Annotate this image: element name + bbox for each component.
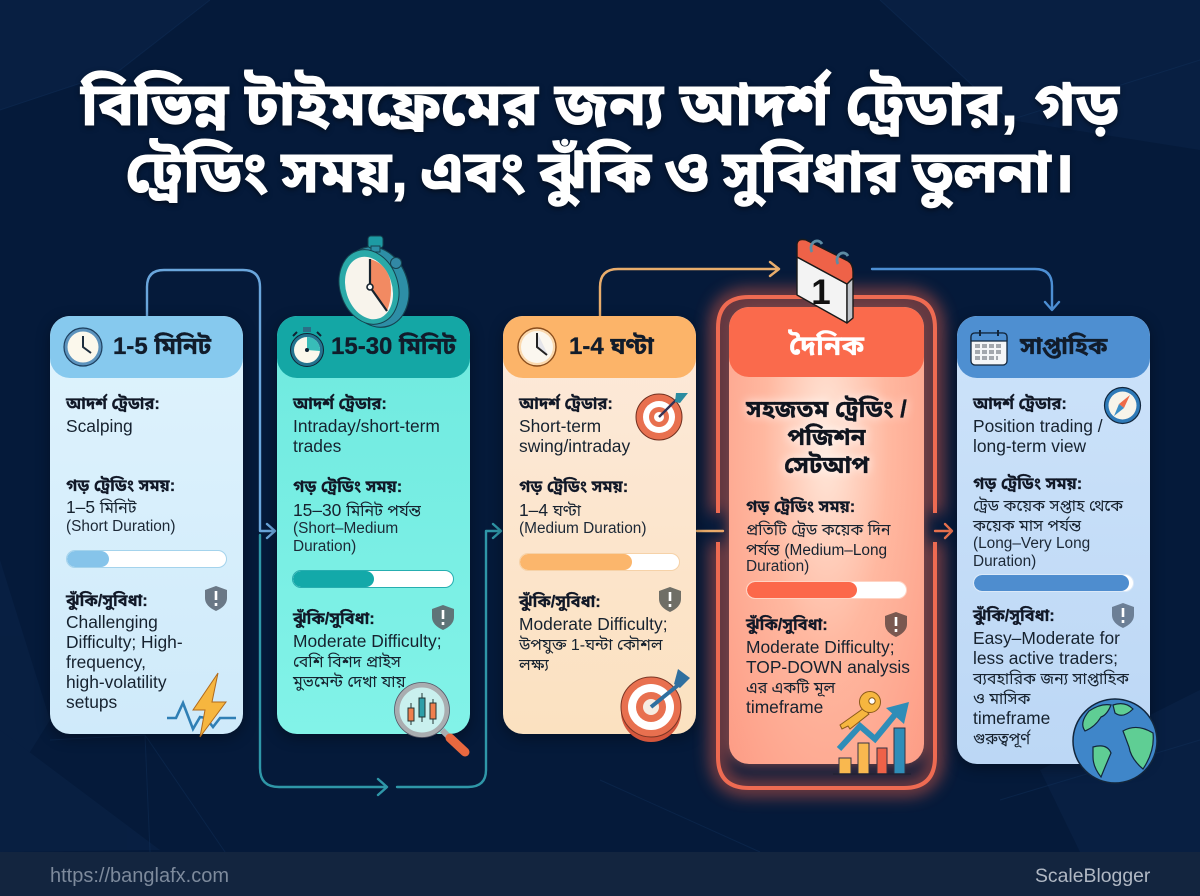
card 3 duration block	[519, 476, 646, 537]
card 3 duration block: (Medium Duration)	[519, 520, 646, 537]
panel: card 3, 1-4 hours	[503, 316, 696, 734]
card 4 progress bar	[746, 581, 907, 599]
icon: globe	[1072, 698, 1158, 784]
panel: card 1, 1-5 minutes	[50, 316, 243, 734]
panel: card 2, 15-30 minutes	[277, 316, 470, 734]
card 4 highlighted text	[742, 392, 910, 479]
card 5 risk block: ঝুঁকি/সুবিধা:	[973, 607, 1055, 625]
card 5 trader block: আদর্শ ট্রেডার:	[973, 395, 1067, 413]
card 2 risk block: ঝুঁকি/সুবিধা:	[293, 610, 375, 628]
card 1 risk block: setups	[66, 692, 117, 712]
title: বিভিন্ন টাইমফ্রেমের জন্য আদর্শ ট্রেডার, গড়	[81, 71, 1119, 138]
card 1 risk block: high-volatility	[66, 672, 167, 692]
card 1 trader block	[66, 394, 160, 436]
card 1 risk block: Challenging	[66, 612, 158, 632]
card 1 header	[50, 316, 243, 378]
card 3 risk block: উপযুক্ত 1-ঘন্টা কৌশল	[519, 637, 663, 654]
card 4 highlighted text: সহজতম ট্রেডিং /	[746, 396, 907, 423]
title: ট্রেডিং সময়, এবং ঝুঁকি ও সুবিধার তুলনা।	[125, 140, 1075, 205]
card 2 trader block: আদর্শ ট্রেডার:	[293, 395, 387, 413]
card 1 duration block: (Short Duration)	[66, 518, 176, 535]
card 2 header	[277, 316, 470, 378]
footer brand: ScaleBlogger	[1035, 865, 1150, 887]
card 4 risk block: এর একটি মূল	[746, 680, 835, 697]
card 5 risk block	[972, 606, 1130, 748]
card 2 trader block: Intraday/short-term	[293, 416, 440, 436]
card 5 risk block: ব্যবহারিক জন্য সাপ্তাহিক	[973, 671, 1129, 688]
card 2 progress bar	[292, 570, 454, 588]
icon: large stopwatch	[338, 236, 410, 328]
card 5 duration block: ট্রেড কয়েক সপ্তাহ থেকে	[973, 498, 1123, 515]
glowing ring around daily card	[698, 278, 954, 808]
icon: weekly calendar	[970, 330, 1008, 366]
card 3 progress bar	[519, 553, 680, 571]
card 5 risk block: less active traders;	[973, 648, 1118, 668]
card 3 risk block: Moderate Difficulty;	[519, 614, 668, 634]
card 1 trader block: আদর্শ ট্রেডার:	[66, 395, 160, 413]
card 5 duration block: Duration)	[973, 552, 1036, 570]
icon: lightning and pulse	[167, 672, 236, 738]
card 4 highlighted text: সেটআপ	[784, 452, 869, 479]
card 5 duration block: (Long–Very Long	[973, 535, 1090, 552]
card 1 risk block: frequency,	[66, 652, 146, 672]
icon: clock	[63, 327, 103, 367]
card 1 trader block: Scalping	[66, 416, 133, 436]
card 3 trader block: Short-term	[519, 416, 601, 436]
card 4 risk block: ঝুঁকি/সুবিধা:	[746, 616, 828, 634]
card 5 risk block: ও মাসিক	[973, 691, 1030, 708]
card 1 heading: 1-5 মিনিট	[113, 333, 211, 360]
card 3 heading: 1-4 ঘণ্টা	[569, 333, 654, 360]
card 5 duration block: কয়েক মাস পর্যন্ত	[973, 518, 1081, 535]
card 5 header	[957, 316, 1150, 378]
card 1 risk block: Difficulty; High-	[66, 632, 183, 652]
card 1 duration block: গড় ট্রেডিং সময়:	[66, 477, 175, 495]
icon: shield	[885, 612, 907, 637]
card 3 duration block: 1–4 ঘণ্টা	[519, 500, 581, 520]
card 2 duration block: Duration)	[293, 538, 356, 554]
card 2 duration block	[293, 476, 421, 554]
card 2 risk block: মুভমেন্ট দেখা যায়	[293, 674, 406, 691]
card 5 risk block: গুরুত্বপূর্ণ	[973, 731, 1030, 748]
card 5 trader block: Position trading /	[973, 416, 1103, 436]
card 2 heading: 15-30 মিনিট	[331, 333, 456, 360]
card 4 risk block: Moderate Difficulty;	[746, 637, 895, 657]
card 1 progress bar	[66, 550, 227, 568]
icon: compass	[1104, 386, 1142, 424]
card 4 duration block	[746, 496, 891, 575]
card 4 risk block: timeframe	[746, 697, 823, 717]
card 5 progress bar	[973, 574, 1134, 592]
card 5 risk block: Easy–Moderate for	[973, 628, 1120, 648]
card 4 duration block: গড় ট্রেডিং সময়:	[746, 498, 855, 516]
card 3 trader block: আদর্শ ট্রেডার:	[519, 395, 613, 413]
card 4 duration block: প্রতিটি ট্রেড কয়েক দিন	[746, 522, 890, 539]
card 2 risk block	[292, 608, 442, 691]
card 4 risk block: TOP-DOWN analysis	[746, 657, 910, 677]
icon: large target with dart	[620, 669, 690, 742]
card 5 risk block: timeframe	[973, 708, 1050, 728]
icon: clock	[517, 327, 557, 367]
panel: card 4, daily	[729, 307, 924, 764]
card 5 heading: সাপ্তাহিক	[1020, 333, 1107, 360]
footer url: https://banglafx.com	[50, 865, 229, 887]
icon: calendar	[796, 238, 854, 324]
card 2 risk block: Moderate Difficulty;	[293, 631, 442, 651]
card 4 heading: দৈনিক	[789, 330, 864, 361]
card 3 header	[503, 316, 696, 378]
icon: calendar: 1	[811, 273, 831, 312]
card 4 risk block	[746, 614, 910, 717]
card 2 trader block: trades	[293, 436, 341, 456]
card 1 risk block	[66, 590, 183, 712]
icon: shield	[205, 586, 227, 611]
icon: shield	[432, 605, 454, 630]
icon: shield	[659, 587, 681, 612]
card 5 trader block: long-term view	[973, 436, 1086, 456]
icon: shield	[1112, 603, 1134, 628]
card 3 trader block	[518, 394, 630, 456]
card 4 duration block: Duration)	[746, 558, 809, 575]
card 2 trader block	[292, 394, 440, 456]
card 1 duration block: 1–5 মিনিট	[66, 497, 137, 517]
footer bar	[0, 852, 1200, 896]
card 3 risk block: লক্ষ্য	[519, 657, 549, 674]
card 3 risk block: ঝুঁকি/সুবিধা:	[519, 593, 601, 611]
card 2 risk block: বেশি বিশদ প্রাইস	[293, 654, 401, 671]
icon: small target	[636, 393, 688, 440]
card 4 highlighted text: পজিশন	[787, 424, 866, 451]
card 5 duration block: গড় ট্রেডিং সময়:	[973, 475, 1082, 493]
card 1 duration block	[66, 476, 176, 535]
panel: card 5, weekly	[957, 316, 1150, 764]
card 1 risk block: ঝুঁকি/সুবিধা:	[66, 592, 148, 610]
card 4 duration block: পর্যন্ত (Medium–Long	[746, 542, 887, 559]
card 3 trader block: swing/intraday	[519, 436, 630, 456]
title	[79, 68, 1122, 212]
icon: key and rising chart	[833, 691, 911, 775]
icon: magnifier with candlesticks	[394, 682, 470, 756]
card 5 trader block	[972, 394, 1103, 456]
icon: small stopwatch	[290, 327, 324, 367]
card 4 header	[729, 307, 924, 377]
card 2 duration block: গড় ট্রেডিং সময়:	[293, 478, 402, 496]
card 3 duration block: গড় ট্রেডিং সময়:	[519, 478, 628, 496]
card 3 risk block	[518, 592, 668, 674]
card 2 duration block: (Short–Medium	[293, 520, 398, 537]
card 5 duration block	[972, 474, 1124, 570]
card 2 duration block: 15–30 মিনিট পর্যন্ত	[293, 500, 421, 520]
